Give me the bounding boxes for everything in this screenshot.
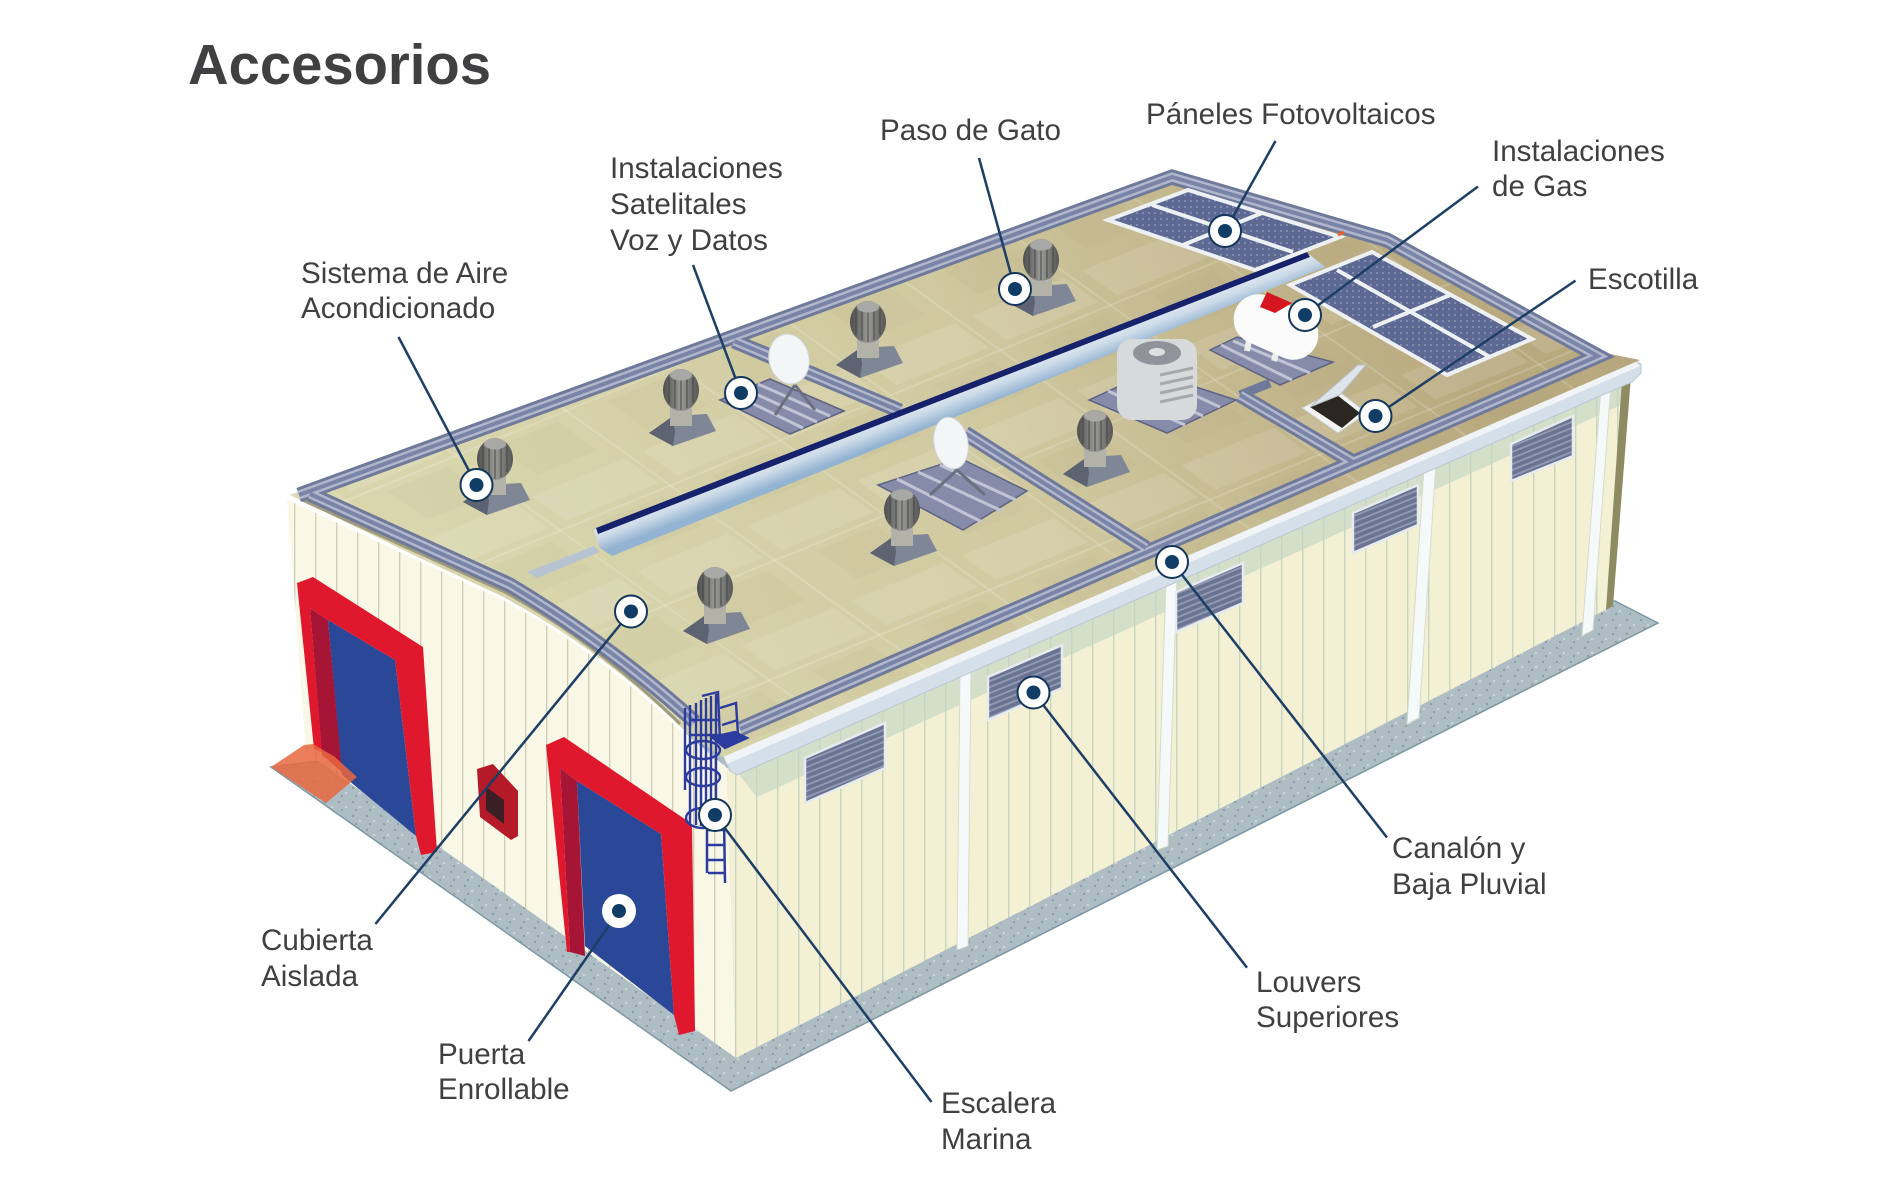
- leader line: [398, 337, 476, 485]
- roof perimeter and cross walkways: [299, 177, 1598, 729]
- leader line: [1172, 562, 1387, 838]
- label: de Gas: [1492, 170, 1587, 203]
- leader line: [1305, 186, 1478, 315]
- roof front half: [287, 242, 1640, 757]
- label: Louvers: [1256, 966, 1361, 999]
- leader line: [375, 612, 631, 924]
- label: Canalón y: [1392, 832, 1525, 865]
- label: Puerta: [438, 1038, 525, 1071]
- label: Instalaciones: [1492, 135, 1665, 168]
- callout: Escalera Marina: [699, 799, 1057, 1156]
- front gable wall: [287, 498, 736, 1058]
- ridge skylight: [594, 252, 1325, 556]
- label: Sistema de Aire: [301, 257, 508, 290]
- turbine vents: [463, 239, 1130, 644]
- label: Marina: [941, 1123, 1032, 1156]
- leader line: [528, 911, 619, 1041]
- marker: [1018, 676, 1050, 708]
- label: Aislada: [261, 960, 359, 993]
- marker: [1209, 215, 1241, 247]
- label: Escalera: [941, 1087, 1056, 1120]
- callout: Sistema de Aire Acondicionado: [301, 257, 508, 501]
- hatch: [1302, 365, 1367, 433]
- leader line: [1376, 281, 1576, 416]
- callout: Cubierta Aislada: [261, 596, 647, 993]
- label: Satelitales: [610, 188, 747, 221]
- leader line: [715, 815, 932, 1102]
- label: Enrollable: [438, 1073, 570, 1106]
- callout: Paso de Gato: [880, 114, 1061, 305]
- connector strip at ridge start: [527, 546, 600, 578]
- callout: Escotilla: [1360, 263, 1699, 432]
- label: Escotilla: [1588, 263, 1699, 296]
- ladder: [685, 692, 747, 883]
- label: Superiores: [1256, 1001, 1399, 1034]
- label: Acondicionado: [301, 292, 495, 325]
- solar panel: upper: [1108, 190, 1344, 270]
- long side wall: [723, 360, 1641, 1058]
- label: Voz y Datos: [610, 224, 768, 257]
- callout: Instalaciones de Gas: [1289, 135, 1665, 331]
- leader line: [1225, 141, 1276, 231]
- callout: Instalaciones Satelitales: [610, 152, 783, 409]
- marker arrow on ground: [271, 744, 357, 803]
- gutter: [723, 360, 1641, 775]
- callout: Louvers Superiores: [1018, 676, 1399, 1034]
- equipment pads: [720, 337, 1333, 530]
- satellite dishes: [764, 330, 985, 495]
- label: Baja Pluvial: [1392, 868, 1547, 901]
- gravel base slab: [271, 601, 1658, 1091]
- marker: [725, 377, 757, 409]
- louvers: [805, 416, 1573, 803]
- marker: [602, 894, 636, 928]
- door: left roll-up: [297, 577, 437, 855]
- downspouts: [957, 384, 1611, 950]
- marker: [1289, 299, 1321, 331]
- door: right roll-up: [546, 737, 695, 1035]
- callout: Puerta Enrollable: [438, 894, 636, 1106]
- marker: [1156, 546, 1188, 578]
- label: Páneles Fotovoltaicos: [1146, 98, 1436, 131]
- air conditioner: [1117, 339, 1197, 420]
- title: Accesorios: [188, 33, 491, 96]
- building illustration: [271, 175, 1658, 1091]
- callout: Canalón y Baja Pluvial: [1156, 546, 1547, 901]
- gas tank: [1226, 286, 1326, 368]
- leader line: [979, 158, 1015, 289]
- solar panel: lower: [1290, 252, 1532, 375]
- fire cabinet: [477, 764, 518, 840]
- roof back half: [290, 175, 1387, 597]
- marker: [699, 799, 731, 831]
- marker: [999, 273, 1031, 305]
- marker: [1360, 400, 1392, 432]
- label: Paso de Gato: [880, 114, 1061, 147]
- marker: [615, 596, 647, 628]
- label: Instalaciones: [610, 152, 783, 185]
- callout: Páneles Fotovoltaicos: [1146, 98, 1436, 247]
- label: Cubierta: [261, 924, 373, 957]
- leader line: [1034, 692, 1247, 968]
- leader line: [693, 265, 741, 393]
- marker: [460, 469, 492, 501]
